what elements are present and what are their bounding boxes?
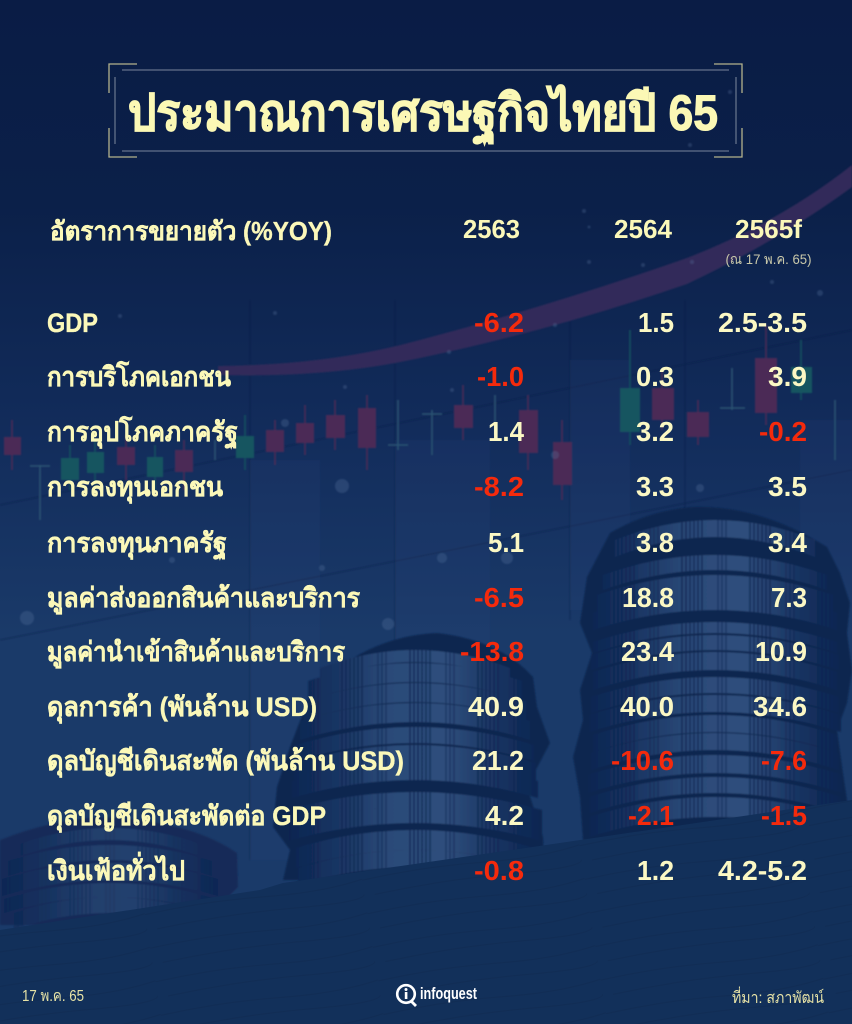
header 2564: 2564 [614,214,673,244]
row: public investment: 3.4 [768,527,807,558]
row: current account: -7.6 [761,745,807,776]
row: exports: 7.3 [771,582,807,613]
row: GDP [47,307,807,338]
coin stacks [0,507,852,929]
row: current account: -10.6 [611,745,674,776]
row: public consumption [47,415,807,450]
header 2563: 2563 [463,214,520,244]
header note: (ณ 17 พ.ค. 65) [726,251,812,267]
table header [50,214,812,267]
row: current account to GDP [47,800,807,833]
bokeh particles [20,90,823,630]
row: headline inflation [47,851,807,886]
row: trade balance: 40.9 [468,691,524,722]
logo wordmark: infoquest [420,984,477,1003]
row: current account to GDP: -2.1 [628,800,674,831]
coin stack: right [573,507,852,840]
wooden surface [0,800,852,1024]
row: current account to GDP: 4.2 [485,800,524,831]
row: imports [47,636,807,669]
row: private investment: 3.3 [636,471,674,502]
row: private consumption: 3.9 [768,361,807,392]
row: current account to GDP: ดุลบัญชีเดินสะพัดต่อ GDP [47,801,326,833]
row: public consumption: 3.2 [636,416,674,447]
title frame [109,64,742,157]
row: imports: -13.8 [460,636,524,667]
row: GDP: -6.2 [474,307,524,338]
row: private consumption [47,360,807,392]
row: trade balance [47,691,807,724]
row: public investment [47,527,807,561]
row: private investment [47,471,807,504]
row: exports [47,582,807,615]
row: public consumption: -0.2 [759,416,807,447]
row: imports: 10.9 [755,636,807,667]
candlesticks [4,325,835,520]
row: public investment: การลงทุนภาครัฐ [47,528,227,561]
row: private investment: การลงทุนเอกชน [47,472,223,504]
icon: infoquest logo [397,984,477,1006]
row: public consumption: 1.4 [488,416,524,447]
row: exports: -6.5 [474,582,524,613]
row: current account [47,745,807,778]
row: headline inflation: 1.2 [637,855,674,886]
data table [47,307,807,886]
row: GDP: 1.5 [638,307,674,338]
row: private investment: 3.5 [768,471,807,502]
coin stack: left [0,817,238,929]
coin stack: middle [273,633,550,885]
row: private consumption: -1.0 [477,361,524,392]
header label: อัตราการขยายตัว (%YOY) [50,216,332,246]
row: GDP: 2.5-3.5 [718,307,807,338]
curve [218,165,852,375]
row: public investment: 5.1 [488,527,524,558]
row: trade balance: ดุลการค้า (พันล้าน USD) [47,692,317,724]
row: public consumption: การอุปโภคภาครัฐ [47,415,238,450]
title: ประมาณการเศรษฐกิจไทยปี 65 [128,84,718,145]
row: headline inflation: เงินเฟ้อทั่วไป [47,851,185,886]
row: private investment: -8.2 [474,471,524,502]
row: private consumption: การบริโภคเอกชน [47,360,231,392]
row: exports: มูลค่าส่งออกสินค้าและบริการ [47,583,360,615]
row: current account to GDP: -1.5 [761,800,807,831]
header 2565f: 2565f [735,214,802,244]
row: headline inflation: -0.8 [474,855,524,886]
row: private consumption: 0.3 [636,361,674,392]
row: current account: 21.2 [472,745,524,776]
footer date: 17 พ.ค. 65 [22,988,84,1005]
row: GDP: GDP [47,308,98,338]
row: trade balance: 34.6 [753,691,807,722]
row: exports: 18.8 [622,582,674,613]
row: imports: 23.4 [621,636,674,667]
row: trade balance: 40.0 [620,691,674,722]
row: current account: ดุลบัญชีเดินสะพัด (พันล้าน USD) [47,746,404,778]
row: headline inflation: 4.2-5.2 [718,855,807,886]
row: imports: มูลค่านำเข้าสินค้าและบริการ [47,637,345,669]
source: ที่มา: สภาพัฒน์ [732,986,824,1007]
row: public investment: 3.8 [636,527,674,558]
